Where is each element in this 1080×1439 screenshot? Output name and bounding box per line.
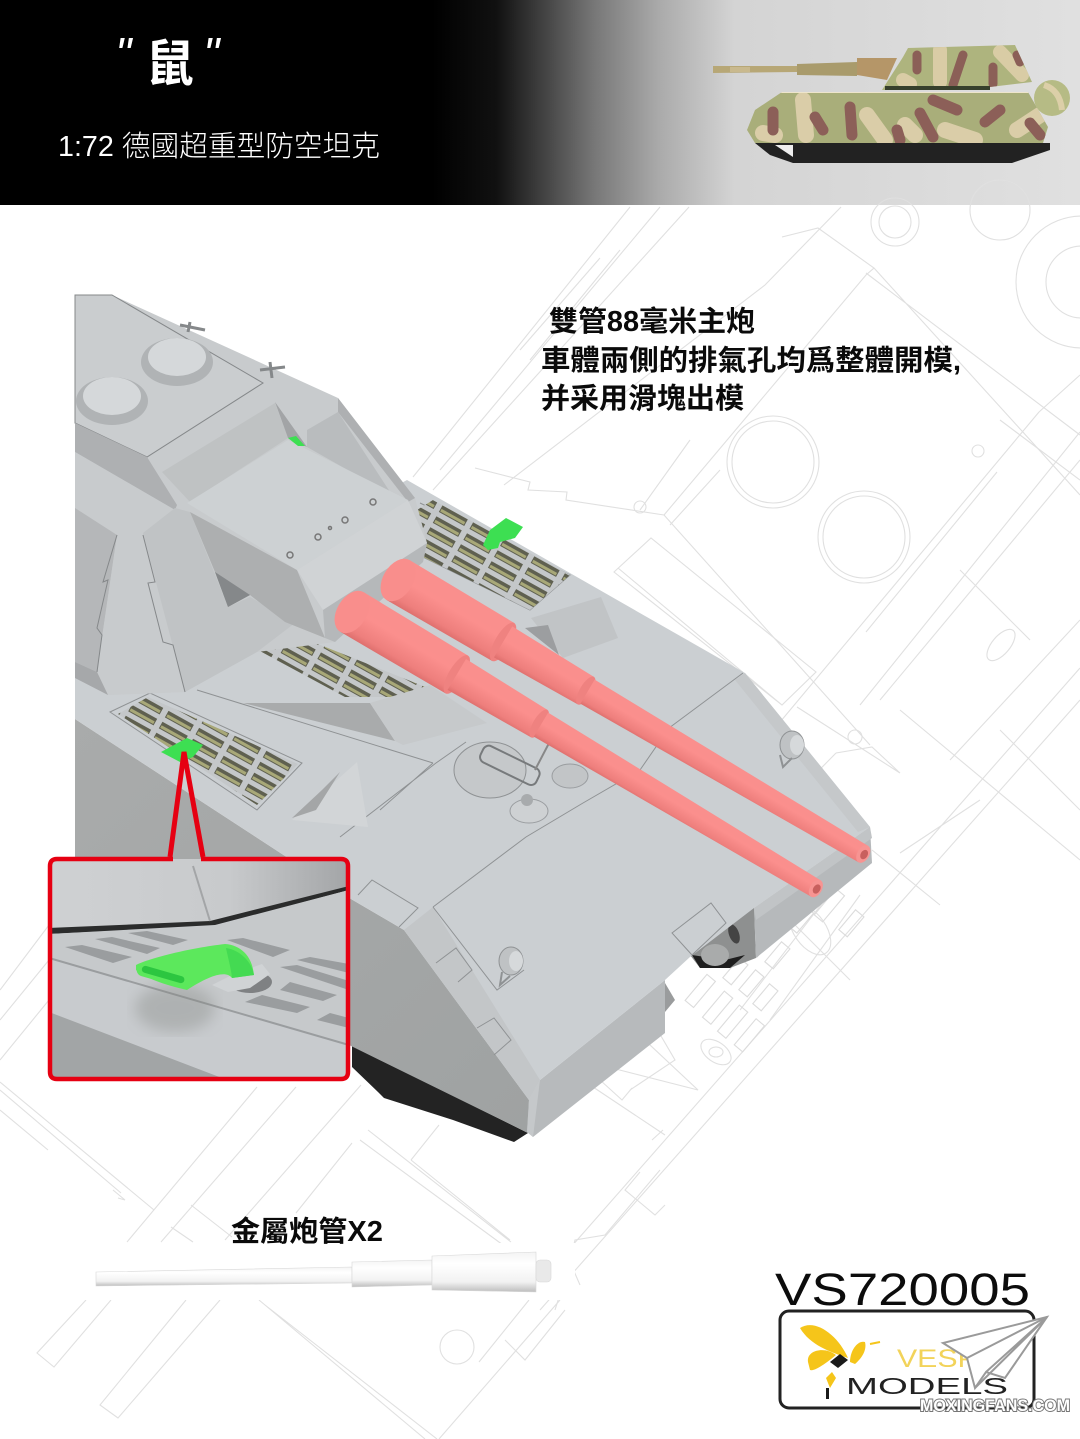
shoulder plate [75, 452, 175, 533]
track [755, 143, 1050, 163]
header title: " [203, 28, 222, 80]
description text [541, 306, 961, 415]
turret base silhouette [75, 295, 427, 695]
barrel [713, 66, 797, 73]
watermark text: MOXINGFANS.COM [920, 1396, 1070, 1415]
recess above gun block [162, 403, 288, 502]
grille panels [118, 500, 570, 805]
watermark paper plane [943, 1317, 1047, 1388]
barrel area white mask [85, 1243, 575, 1300]
hull left side [75, 719, 529, 1133]
product code: VS720005 [775, 1264, 1030, 1315]
gun block front [297, 500, 427, 610]
header title: 鼠 [146, 24, 194, 96]
roof hatch details [80, 322, 285, 500]
green exhaust parts on hull [161, 436, 523, 762]
tracks under hull [352, 1045, 528, 1142]
header band [0, 0, 1080, 205]
tow hooks [499, 731, 804, 985]
green exhaust close-up [135, 944, 254, 990]
brand logo: MODELS [846, 1373, 1008, 1399]
red frame [50, 859, 348, 1079]
hull top surface [75, 480, 870, 1100]
upper hull [882, 45, 1032, 90]
hull seams [110, 503, 743, 1055]
detail inset with red callout [49, 752, 349, 1080]
lower hull [745, 90, 1050, 145]
inset picture [49, 857, 349, 1080]
bee mark [800, 1325, 880, 1399]
gun block top [187, 440, 408, 570]
metal barrel part [96, 1252, 551, 1292]
brand logo [780, 1311, 1034, 1408]
header title: " [115, 28, 134, 80]
front lower plates [527, 980, 665, 1137]
twin gun barrel, front [327, 585, 833, 911]
roof plate [75, 295, 263, 457]
column faces [75, 508, 117, 672]
description text: 雙管88毫米主炮 [549, 306, 755, 338]
red pointer [170, 752, 203, 857]
sphere [1034, 80, 1070, 116]
roof bevel [75, 423, 177, 510]
header subtitle: 1:72 德國超重型防空坦克 [58, 130, 380, 163]
turret [75, 295, 427, 695]
header title [115, 24, 222, 96]
brand name: VESPID [897, 1345, 1008, 1373]
main tank model [75, 295, 880, 1142]
header tank illustration [713, 44, 1070, 163]
bevel strips [404, 907, 540, 1100]
underside with wheels [690, 905, 756, 968]
twin gun barrel, rear [373, 553, 880, 877]
description text: 并采用滑塊出模 [541, 383, 744, 415]
gun block side [190, 512, 325, 638]
metal barrel label: 金屬炮管X2 [231, 1216, 383, 1248]
description text: 車體兩側的排氣孔均爲整體開模, [541, 345, 961, 377]
roof domes [76, 338, 213, 425]
deck wedges and hatch [243, 597, 618, 827]
turret right cheek [338, 398, 415, 502]
